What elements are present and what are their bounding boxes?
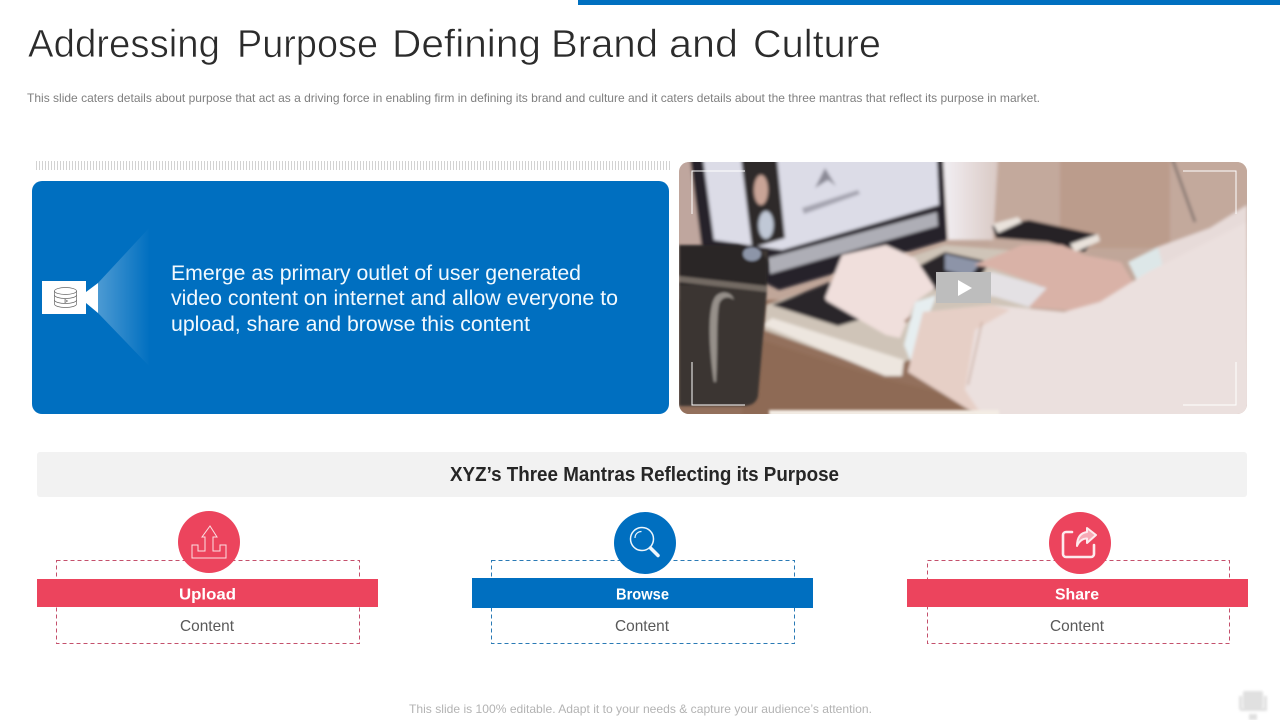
frame corner brackets [692, 171, 1236, 405]
card: browse: Content [615, 618, 670, 635]
title [28, 23, 881, 66]
icon: video camera with film reel [42, 281, 98, 314]
heading bar: three mantras: XYZ’s Three Mantras Reflecting its Purpose [450, 464, 839, 486]
card: share [907, 512, 1248, 644]
projector beam [98, 227, 150, 367]
title: Addressing [28, 23, 220, 66]
card: upload: Upload [179, 586, 236, 604]
icon: watermark chair [1239, 691, 1267, 720]
icon: upload [178, 511, 240, 573]
heading bar: three mantras [37, 452, 1247, 497]
card: browse [472, 512, 813, 644]
footer note: This slide is 100% editable. Adapt it to your needs & capture your audience’s attention. [409, 702, 872, 716]
statement text: video content on internet and allow everyone to [171, 287, 618, 310]
statement text [171, 262, 618, 336]
card: upload: Content [180, 618, 235, 635]
statement text: Emerge as primary outlet of user generated [171, 262, 581, 285]
panel: video photo of hands on laptop [679, 158, 1252, 420]
top accent bar [578, 0, 1280, 5]
subtitle text: This slide caters details about purpose that act as a driving force in enabling firm in defining its brand and culture and it caters details about the three mantras that reflect its purpose in market. [27, 91, 1040, 105]
icon: magnifier [614, 512, 676, 574]
card: share: Content [1050, 618, 1105, 635]
title: Purpose [237, 23, 378, 66]
icon: play button [936, 272, 991, 303]
icon: share [1049, 512, 1111, 574]
panel: blue statement [32, 181, 669, 414]
title: Brand [551, 23, 658, 66]
title: Culture [753, 23, 881, 66]
title: and [669, 23, 738, 66]
statement text: upload, share and browse this content [171, 313, 530, 336]
card: share: Share [1055, 586, 1099, 604]
title: Defining [392, 23, 541, 66]
card: upload [37, 511, 378, 644]
card: browse: Browse [616, 586, 669, 604]
